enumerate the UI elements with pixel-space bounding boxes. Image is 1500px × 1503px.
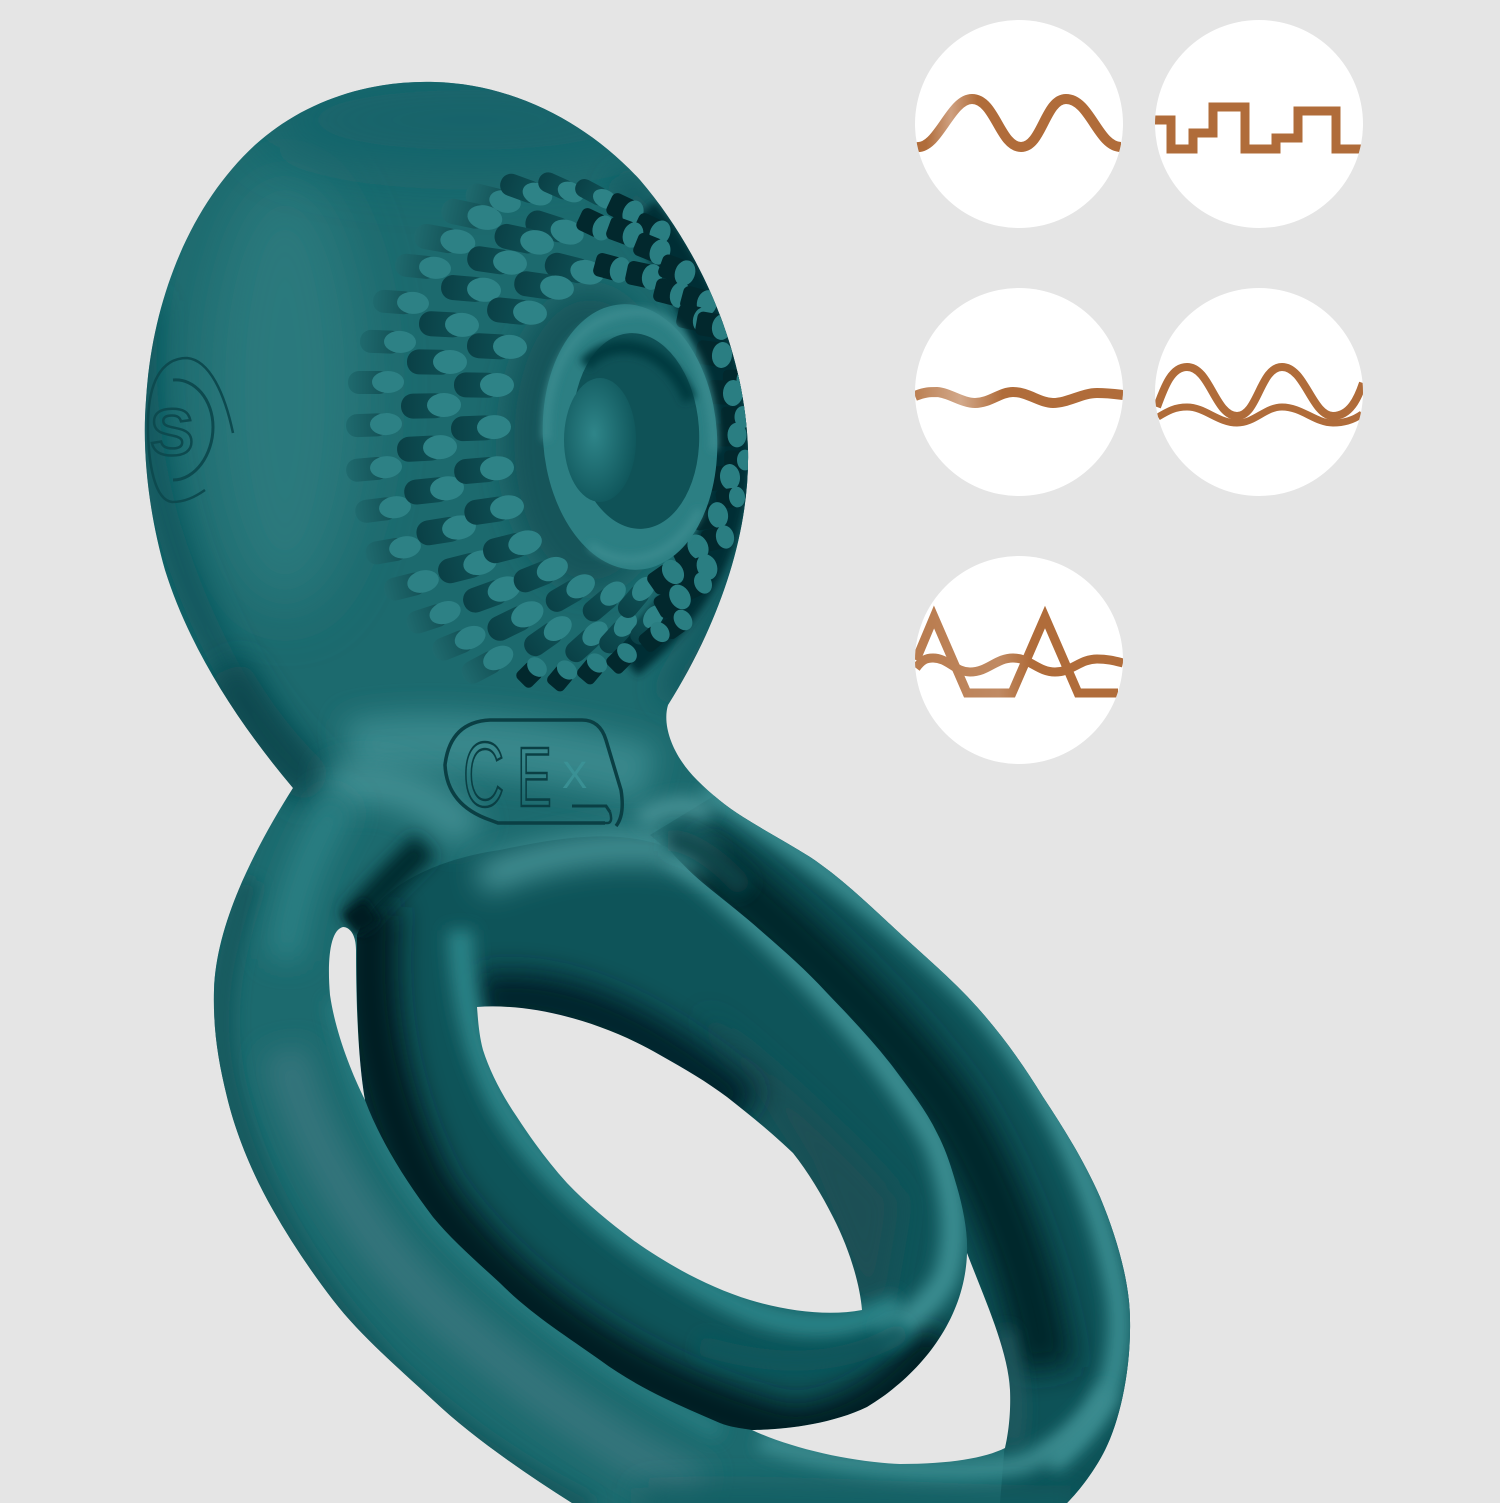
- silhouette base: [100, 60, 1160, 1503]
- embossed certification badge: C: [463, 724, 504, 826]
- head shading: [144, 70, 746, 790]
- back band shading: [650, 786, 1130, 1503]
- gap between bands: [329, 927, 365, 1100]
- embossed S logo: S: [150, 395, 194, 469]
- embossed certification badge: X: [562, 755, 587, 797]
- collar shadow: [502, 287, 636, 593]
- pattern icon: stepped wave: [1155, 20, 1363, 228]
- product illustration: [144, 82, 1130, 1503]
- front and left band shading: [221, 880, 1110, 1503]
- embossed certification badge: [445, 720, 622, 826]
- pattern icon: peaks and wave: [915, 556, 1123, 764]
- embossed S logo: [148, 358, 233, 502]
- pattern icon: gentle wave: [915, 288, 1123, 496]
- inner ring shading: [356, 836, 967, 1430]
- gap at lower right: [752, 1253, 1010, 1464]
- pattern icon: sine wave: [915, 20, 1123, 228]
- embossed certification badge: E: [517, 730, 552, 824]
- ring centre opening: [477, 1006, 862, 1313]
- pattern icon: double wave: [1155, 288, 1363, 496]
- neck highlights: [285, 743, 745, 960]
- bump field: [345, 169, 754, 694]
- suction opening: [534, 298, 726, 576]
